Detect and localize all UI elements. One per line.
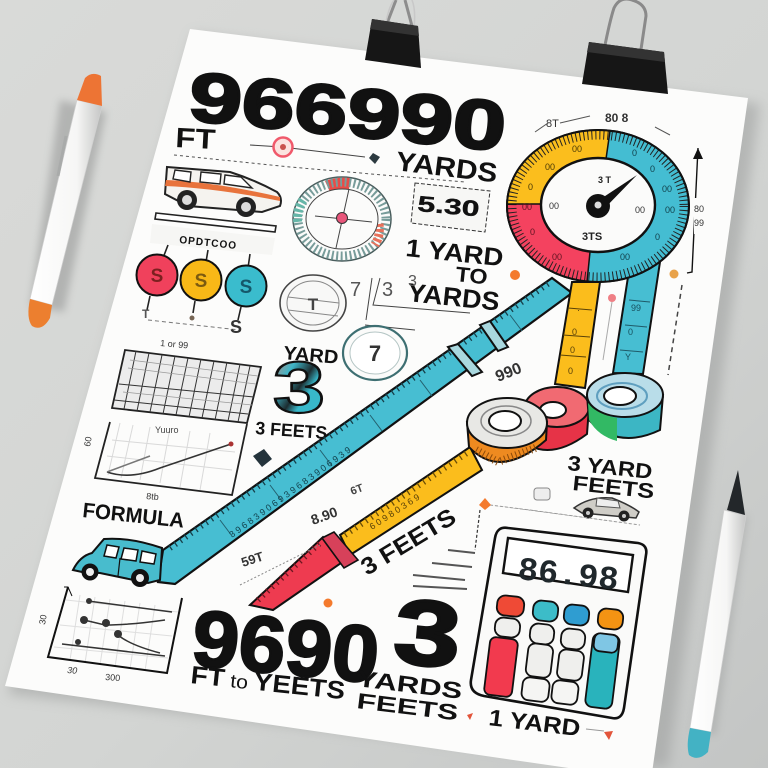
orange dots bbox=[510, 270, 678, 360]
label: 1 yard: 1 YARD bbox=[487, 704, 582, 741]
line chart: Yuuro bbox=[155, 425, 179, 435]
gauge: 00 bbox=[572, 144, 582, 154]
connector with red node bbox=[174, 138, 465, 182]
small labels near tapes: 8.90 bbox=[309, 503, 340, 528]
step circles: S bbox=[240, 277, 252, 298]
tape roll: grey and orange bbox=[467, 398, 547, 462]
step circles: S bbox=[195, 271, 207, 292]
notes right of small gauge bbox=[350, 273, 470, 330]
gauge: 00 bbox=[662, 184, 672, 194]
value box: 5.30 bbox=[411, 183, 490, 232]
gauge: 00 bbox=[552, 252, 562, 262]
tape: vertical yellow: 0 bbox=[568, 366, 573, 376]
gauge: 0 bbox=[632, 148, 637, 158]
tape: vertical yellow bbox=[555, 282, 600, 388]
dial: small gauge bbox=[280, 275, 346, 331]
tape: red bbox=[250, 537, 344, 610]
tape roll: red bbox=[525, 387, 589, 450]
gauge top note bbox=[535, 111, 670, 135]
icon: blue car bbox=[73, 539, 162, 587]
notes under step circles: S bbox=[230, 317, 242, 337]
tape: vertical blue: 0 bbox=[628, 327, 633, 337]
line chart bbox=[82, 422, 247, 502]
label: 3 yard feets bbox=[566, 452, 655, 504]
step circles: S bbox=[151, 266, 163, 287]
label: yards feets: FEETS bbox=[355, 688, 460, 725]
label: yard: YARD bbox=[283, 343, 339, 369]
gauge: 00 bbox=[635, 205, 645, 215]
gauge top note: 80 8 bbox=[605, 111, 629, 125]
tape: long blue: 3 9 6 8 3 9 0 6 9 3 9 6 8 3 9 0 6 9 3 9 bbox=[227, 445, 353, 540]
label: FT: FT bbox=[175, 122, 216, 155]
small labels near tapes bbox=[239, 482, 365, 608]
label: yards feets: YARDS bbox=[355, 665, 464, 704]
big coloured 3: 3 bbox=[273, 348, 325, 428]
gauge: 0 bbox=[650, 164, 655, 174]
gauge top note: 8T bbox=[546, 118, 559, 130]
tape: vertical blue: Y bbox=[625, 352, 631, 362]
label: 990 on tape: 990 bbox=[493, 360, 524, 386]
value box: 5.30: 5.30 bbox=[417, 191, 481, 221]
gauge: 00 bbox=[665, 205, 675, 215]
table grid bbox=[112, 350, 261, 423]
dial: number 7 clock bbox=[343, 326, 407, 380]
bottom line chart: 30 bbox=[37, 614, 49, 625]
notes right of small gauge: 3 bbox=[382, 279, 393, 301]
icon: small car bbox=[574, 498, 639, 522]
bottom line chart: 30 bbox=[67, 665, 78, 676]
pen: right bbox=[688, 470, 748, 758]
notes under step circles: 1 or 99 bbox=[160, 338, 189, 350]
icon: van bbox=[165, 167, 281, 217]
gauge: 0 bbox=[528, 182, 533, 192]
arrow and side dimension: 99 bbox=[694, 218, 704, 228]
gauge bbox=[507, 130, 689, 282]
pen: left bbox=[28, 74, 106, 328]
tape joint bbox=[322, 532, 358, 568]
notes above calculator bbox=[413, 488, 640, 589]
label: yards feets bbox=[355, 665, 464, 725]
line chart: 8tb bbox=[146, 491, 159, 502]
label: 3 yard feets: FEETS bbox=[571, 472, 655, 504]
notes under step circles bbox=[142, 307, 242, 350]
dial: number 7 clock: 7 bbox=[369, 341, 381, 366]
gauge: 0 bbox=[530, 227, 535, 237]
tape: long blue bbox=[158, 278, 572, 584]
notes right of small gauge: 7 bbox=[350, 279, 361, 301]
title: 966990: 966990 bbox=[186, 57, 510, 166]
step circles bbox=[136, 254, 266, 320]
tape: vertical yellow: · bbox=[577, 305, 580, 315]
gauge: 3 T bbox=[598, 175, 612, 185]
heading: 1 yard to yards bbox=[404, 234, 505, 317]
label: YARDS: YARDS bbox=[394, 146, 499, 188]
calculator keys bbox=[484, 595, 624, 709]
tape: yellow: 6 0 9 8 0 3 6 9 bbox=[368, 492, 421, 532]
heading: 1 yard to yards: 1 YARD bbox=[404, 234, 505, 272]
gauge: 00 bbox=[620, 252, 630, 262]
arrow and side dimension: 80 bbox=[694, 204, 704, 214]
big number: 9690: 9690 bbox=[188, 593, 383, 700]
notes right of small gauge: 3 bbox=[408, 273, 417, 290]
tape: vertical blue bbox=[613, 262, 660, 374]
tape: yellow bbox=[340, 447, 482, 555]
calculator display bbox=[503, 538, 633, 600]
line chart: 60 bbox=[82, 436, 94, 447]
tape roll: blue bbox=[587, 373, 663, 441]
calculator bbox=[471, 528, 646, 718]
big number: 3: 3 bbox=[390, 580, 465, 688]
options bar with label bbox=[150, 213, 276, 268]
label: FT to YEETS: FT to YEETS bbox=[189, 661, 346, 705]
side notes bbox=[668, 285, 682, 375]
dial: small gauge: T bbox=[308, 295, 319, 314]
tape clips on blue tape bbox=[448, 321, 508, 376]
bottom line chart bbox=[37, 587, 182, 683]
gauge: 0 bbox=[655, 232, 660, 242]
tape: vertical yellow: 0 bbox=[570, 345, 575, 355]
small labels near tapes: 6T bbox=[349, 482, 365, 498]
label: 3 feets: 3 FEETS bbox=[255, 418, 328, 443]
red marks by 1 yard bbox=[467, 713, 613, 740]
small marker bbox=[253, 449, 272, 467]
label: formula: FORMULA bbox=[81, 499, 185, 533]
tape: vertical yellow: 0 bbox=[572, 327, 577, 337]
small labels near tapes: 59T bbox=[239, 549, 265, 570]
options bar with label: OPDTCOO bbox=[179, 234, 238, 252]
heading: 1 yard to yards: YARDS bbox=[406, 277, 501, 317]
gauge: 00 bbox=[549, 201, 559, 211]
heading: 1 yard to yards: TO bbox=[454, 263, 489, 289]
gauge: 3TS bbox=[582, 231, 602, 243]
notes under step circles: T bbox=[142, 307, 150, 321]
tape: vertical blue: 99 bbox=[631, 303, 641, 313]
label: 3 feets diagonal: 3 FEETS bbox=[356, 503, 461, 581]
label: 3 yard feets: 3 YARD bbox=[566, 452, 653, 484]
dial: compass bbox=[293, 177, 391, 261]
calculator display: 86.98 bbox=[516, 552, 620, 600]
bottom line chart: 300 bbox=[105, 672, 121, 683]
binder clip: left bbox=[365, 0, 421, 68]
binder clip: right bbox=[582, 0, 668, 94]
gauge: 00 bbox=[545, 162, 555, 172]
arrow and side dimension bbox=[687, 148, 704, 273]
gauge: 00 bbox=[522, 202, 532, 212]
